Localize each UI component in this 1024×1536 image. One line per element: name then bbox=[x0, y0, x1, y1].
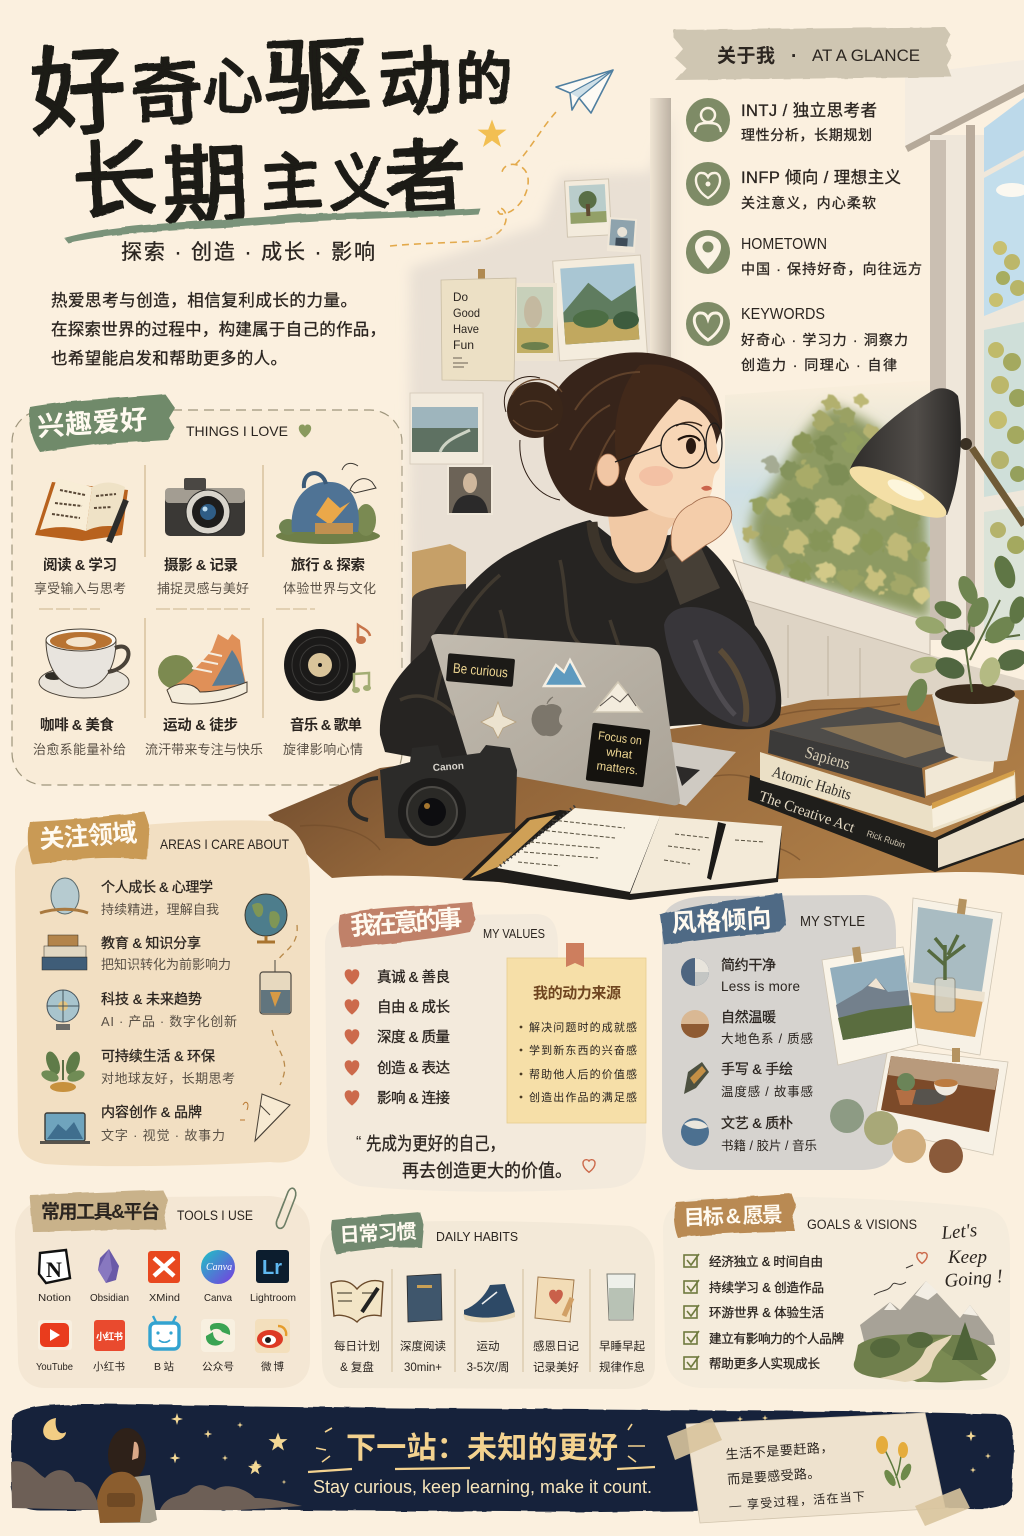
title: 动 bbox=[375, 21, 455, 132]
quote bbox=[356, 1134, 595, 1181]
tool: xmind: XMind bbox=[149, 1292, 180, 1304]
tool: notion bbox=[38, 1250, 71, 1304]
item: hometown: 中国 · 保持好奇，向往远方 bbox=[741, 261, 922, 277]
item: sustainability bbox=[40, 1048, 235, 1092]
habit: gratitude journal: 记录美好 bbox=[533, 1360, 579, 1374]
value list: 真诚 & 善良 bbox=[377, 968, 450, 986]
title: 期 bbox=[160, 114, 250, 242]
habit: gratitude journal bbox=[533, 1277, 579, 1374]
eye and brow bbox=[686, 438, 696, 454]
window frame and panes bbox=[930, 135, 1024, 640]
book: atomic habits bbox=[760, 752, 1016, 832]
habit: exercise: 运动 bbox=[476, 1340, 500, 1353]
habit: exercise: 3-5次/周 bbox=[467, 1360, 509, 1374]
ribbon bbox=[30, 1190, 168, 1232]
clouds bbox=[11, 1461, 302, 1510]
tool: canva bbox=[201, 1250, 235, 1304]
item: warm: 自然温暖 bbox=[721, 1009, 776, 1025]
note: do good have fun bbox=[441, 278, 516, 381]
statue print bbox=[515, 283, 557, 361]
item: keywords: 创造力 · 同理心 · 自律 bbox=[741, 357, 897, 373]
habit: exercise bbox=[463, 1284, 515, 1374]
habit: deep reading: 30min+ bbox=[404, 1362, 442, 1374]
item: technology bbox=[47, 990, 237, 1030]
pen bbox=[707, 822, 726, 880]
item: keywords bbox=[686, 302, 908, 373]
illustration: camera: Canon bbox=[432, 761, 464, 774]
ribbon bbox=[28, 812, 149, 864]
tool: notion: Notion bbox=[38, 1292, 71, 1304]
portrait postcard bbox=[447, 465, 493, 515]
sticker: focus on what matters bbox=[586, 723, 650, 787]
flower bbox=[876, 1436, 913, 1488]
fringe bbox=[615, 364, 720, 484]
handwritten note: Keep bbox=[947, 1247, 987, 1268]
tool: lightroom bbox=[250, 1250, 296, 1304]
illustration: open notebook bbox=[462, 806, 782, 900]
title bbox=[26, 9, 512, 242]
note paper: 而是要感受路。 bbox=[727, 1465, 821, 1487]
banner subtitle: Stay curious, keep learning, make it count. bbox=[313, 1476, 652, 1497]
panel shape bbox=[662, 895, 896, 1170]
title: 心 bbox=[203, 39, 263, 126]
small tree postcard bbox=[565, 179, 611, 237]
item: music: 音乐 & 歌单 bbox=[290, 716, 362, 734]
icon: jar bbox=[260, 960, 291, 1014]
tool: canva: Canva bbox=[206, 1262, 232, 1273]
checklist: 帮助更多人实现成长 bbox=[709, 1356, 820, 1371]
window sill bbox=[733, 560, 930, 655]
habit: sleep early and water: 早睡早起 bbox=[599, 1340, 645, 1353]
item: keywords: KEYWORDS bbox=[741, 306, 825, 323]
tool: lightroom: Lightroom bbox=[250, 1292, 296, 1304]
title: 主 bbox=[258, 130, 324, 224]
habit: sleep early and water bbox=[599, 1274, 645, 1374]
book: sapiens: Sapiens bbox=[803, 743, 852, 774]
pot bbox=[932, 687, 1019, 762]
panel shape bbox=[325, 914, 646, 1192]
tool: xiaohongshu: 小红书 bbox=[96, 1331, 123, 1343]
item: intj: 理性分析，长期规划 bbox=[741, 127, 872, 143]
item: travel: 体验世界与文化 bbox=[283, 581, 376, 596]
panel shape bbox=[663, 1197, 1010, 1390]
intro paragraph: 也希望能启发和帮助更多的人。 bbox=[51, 349, 287, 368]
item: sustainability: 对地球友好，长期思考 bbox=[101, 1071, 235, 1086]
quote: 再去创造更大的价值。 bbox=[402, 1161, 572, 1181]
tool: youtube bbox=[36, 1320, 73, 1373]
tool: xiaohongshu bbox=[93, 1320, 125, 1373]
collar bbox=[592, 522, 676, 578]
item: sport bbox=[145, 634, 263, 757]
habit: deep reading bbox=[400, 1274, 446, 1374]
ribbon bbox=[331, 1212, 424, 1254]
item: literary bbox=[681, 1115, 817, 1153]
lid bbox=[431, 634, 680, 805]
intro paragraph: 热爱思考与创造，相信复利成长的力量。 bbox=[51, 291, 357, 310]
star bbox=[478, 120, 506, 147]
item: education bbox=[42, 935, 231, 972]
item: warm bbox=[681, 1009, 813, 1046]
item: infp: INFP 倾向 / 理想主义 bbox=[741, 168, 901, 187]
sticky note: motivation bbox=[507, 943, 646, 1123]
dividers bbox=[145, 465, 263, 718]
keyboard base bbox=[672, 742, 736, 806]
note paper: — 享受过程，活在当下 bbox=[729, 1488, 865, 1513]
heading: 目标 & 愿景 bbox=[683, 1204, 783, 1230]
tool: bilibili: B站 bbox=[154, 1360, 174, 1373]
icon: paper plane bbox=[556, 70, 613, 113]
ribbon bbox=[29, 394, 175, 452]
face bbox=[622, 397, 720, 518]
sticky note: motivation: 创造出作品的满足感 bbox=[529, 1090, 637, 1104]
icon: heart bbox=[299, 424, 311, 437]
item: intj: INTJ / 独立思考者 bbox=[741, 101, 877, 120]
sweater bbox=[380, 520, 781, 762]
heading: 关注领域 bbox=[38, 819, 138, 854]
birds bbox=[874, 1265, 913, 1295]
tool: xiaohongshu: 小红书 bbox=[93, 1360, 125, 1373]
banner: next stop bbox=[11, 1404, 1014, 1526]
tool: weibo: 微博 bbox=[261, 1360, 284, 1373]
heading: 关于我 bbox=[717, 45, 775, 67]
book: the creative act bbox=[748, 775, 1024, 872]
panel: my values bbox=[325, 902, 646, 1192]
item: warm: 大地色系 / 质感 bbox=[721, 1031, 813, 1046]
item: education: 把知识转化为前影响力 bbox=[101, 957, 231, 972]
book: sapiens bbox=[768, 707, 996, 798]
handwritten note: Let's bbox=[940, 1220, 978, 1244]
girl with backpack bbox=[97, 1428, 157, 1523]
habit: daily plan bbox=[331, 1281, 383, 1374]
item: sustainability: 可持续生活 & 环保 bbox=[101, 1048, 215, 1064]
value list: 自由 & 成长 bbox=[377, 999, 450, 1016]
item: coffee: 治愈系能量补给 bbox=[33, 742, 126, 757]
tool: obsidian: Obsidian bbox=[90, 1292, 129, 1304]
panel: my style: MY STYLE bbox=[800, 914, 865, 930]
title: 奇 bbox=[127, 32, 206, 141]
illustration: mountains and road bbox=[854, 1281, 996, 1382]
ear bbox=[597, 454, 619, 486]
panel: about at a glance bbox=[674, 27, 952, 373]
sticker: be curious bbox=[446, 653, 515, 687]
dashed trail bbox=[272, 925, 297, 1085]
tape bbox=[478, 269, 485, 284]
sticky note: motivation: 学到新东西的兴奋感 bbox=[529, 1043, 637, 1057]
colour swatches bbox=[830, 1099, 963, 1173]
book: the creative act: The Creative Act bbox=[757, 789, 857, 837]
tool: youtube: YouTube bbox=[36, 1361, 73, 1373]
subtitle: 探索 · 创造 · 成长 · 影响 bbox=[121, 241, 375, 264]
illustration: desk plant bbox=[903, 553, 1024, 762]
habit: daily plan: 每日计划 bbox=[334, 1339, 380, 1353]
note: do good have fun: Do bbox=[453, 290, 468, 304]
tool: canva: Canva bbox=[204, 1292, 232, 1304]
panel: areas i care about bbox=[15, 812, 310, 1166]
ribbon bbox=[674, 27, 952, 80]
item: technology: 科技 & 未来趋势 bbox=[101, 991, 202, 1007]
sticker: outline mountain bbox=[594, 682, 642, 712]
title: 好 bbox=[26, 12, 129, 156]
sticky note: motivation: 我的动力来源 bbox=[533, 984, 621, 1002]
item: content creation bbox=[40, 1104, 225, 1144]
tape bbox=[667, 1418, 722, 1460]
neck bbox=[606, 500, 682, 573]
checklist bbox=[684, 1254, 844, 1371]
tool: xmind bbox=[148, 1251, 180, 1304]
tool: weibo bbox=[255, 1319, 290, 1373]
panel: goals and visions bbox=[663, 1194, 1010, 1390]
illustration: desk lamp bbox=[844, 388, 1024, 527]
illustration: desk bbox=[268, 690, 1024, 891]
panel shape bbox=[15, 820, 310, 1166]
title: 者 bbox=[381, 111, 469, 234]
book: the creative act: Rick Rubin bbox=[865, 828, 907, 850]
checklist: 持续学习 & 创造作品 bbox=[709, 1280, 824, 1295]
panel: tools bbox=[15, 1188, 310, 1388]
panel shape bbox=[15, 1196, 310, 1388]
sticky note: motivation: 解决问题时的成就感 bbox=[529, 1020, 637, 1034]
item: travel: 旅行 & 探索 bbox=[291, 556, 365, 574]
heading: 风格倾向 bbox=[671, 905, 772, 938]
item: growth: 个人成长 & 心理学 bbox=[101, 879, 213, 895]
raised arm bbox=[664, 607, 776, 727]
item: infp: 关注意义，内心柔软 bbox=[741, 195, 876, 211]
polaroid: mountain bbox=[822, 947, 918, 1065]
intro paragraph: 在探索世界的过程中，构建属于自己的作品， bbox=[51, 320, 386, 339]
dividers bbox=[392, 1269, 590, 1372]
item: infp bbox=[686, 162, 901, 211]
item: photography: 捕捉灵感与美好 bbox=[157, 581, 249, 596]
icon: paperclip bbox=[276, 1188, 296, 1228]
item: sport: 流汗带来专注与快乐 bbox=[145, 742, 263, 757]
illustration: wall pictures bbox=[410, 179, 647, 690]
heading: 日常习惯 bbox=[339, 1220, 417, 1247]
banner heading: 下一站：未知的更好 bbox=[346, 1432, 618, 1465]
illustration: laptop bbox=[431, 634, 736, 806]
panel: daily habits: DAILY HABITS bbox=[436, 1229, 518, 1244]
panel: about at a glance: AT A GLANCE bbox=[812, 46, 920, 65]
item: reading: 阅读 & 学习 bbox=[43, 556, 117, 574]
moon bbox=[43, 1418, 66, 1440]
item: content creation: 文字 · 视觉 · 故事力 bbox=[101, 1128, 225, 1143]
hair bun bbox=[504, 377, 563, 500]
item: growth bbox=[40, 878, 219, 917]
habit: gratitude journal: 感恩日记 bbox=[533, 1339, 579, 1353]
polaroid: coffee on table bbox=[873, 1048, 1008, 1155]
icon: heart bbox=[917, 1253, 927, 1263]
quote: “ bbox=[356, 1134, 361, 1151]
tool: obsidian bbox=[90, 1249, 129, 1304]
landscape print bbox=[553, 255, 647, 361]
panel: hobbies: THINGS I LOVE bbox=[186, 423, 288, 439]
sticker: mountain bbox=[544, 660, 584, 686]
checklist: 经济独立 & 时间自由 bbox=[709, 1254, 823, 1269]
item: reading: 享受输入与思考 bbox=[34, 581, 126, 596]
hair back bbox=[544, 352, 722, 517]
item: music bbox=[283, 625, 371, 757]
value list: 深度 & 质量 bbox=[377, 1029, 450, 1046]
glasses bbox=[615, 423, 722, 468]
item: content creation: 内容创作 & 品牌 bbox=[101, 1104, 202, 1120]
title: 驱 bbox=[260, 9, 373, 132]
item: handwriting: 温度感 / 故事感 bbox=[721, 1084, 813, 1099]
handwritten note: Going ! bbox=[944, 1266, 1004, 1292]
sticker: star bbox=[481, 702, 516, 738]
icon: sketched paper plane bbox=[240, 1094, 290, 1141]
value list bbox=[345, 968, 450, 1107]
illustration: stacked books bbox=[748, 707, 1024, 872]
item: coffee bbox=[33, 629, 129, 757]
habit: sleep early and water: 规律作息 bbox=[599, 1360, 645, 1374]
panel: my values: MY VALUES bbox=[483, 926, 545, 941]
lower wall panels bbox=[745, 600, 1024, 712]
panel: my style bbox=[660, 893, 1008, 1173]
item: travel bbox=[276, 463, 380, 596]
ribbon bbox=[339, 902, 476, 948]
handwritten note bbox=[940, 1220, 1004, 1292]
note paper: 生活不是要赶路， bbox=[725, 1439, 834, 1462]
habit: deep reading: 深度阅读 bbox=[400, 1339, 446, 1353]
panel: tools: TOOLS I USE bbox=[177, 1208, 253, 1223]
item: literary: 书籍 / 胶片 / 音乐 bbox=[721, 1138, 817, 1153]
panel: areas i care about: AREAS I CARE ABOUT bbox=[160, 836, 289, 852]
panel shape bbox=[320, 1221, 655, 1389]
cardboard box and chair bbox=[412, 544, 466, 598]
item: handwriting: 手写 & 手绘 bbox=[721, 1061, 793, 1077]
item: keywords: 好奇心 · 学习力 · 洞察力 bbox=[741, 332, 908, 348]
item: hometown: HOMETOWN bbox=[741, 236, 827, 253]
item: photography bbox=[157, 478, 249, 596]
intro paragraph bbox=[51, 291, 386, 368]
title underline brush stroke bbox=[64, 208, 480, 243]
small portrait postcard bbox=[607, 217, 637, 253]
title: 的 bbox=[456, 35, 512, 116]
sticker: focus on what matters: what bbox=[604, 744, 634, 762]
item: sport: 运动 & 徒步 bbox=[163, 717, 238, 734]
tool: notion: N bbox=[46, 1257, 62, 1282]
dashed flight path bbox=[390, 112, 556, 246]
note: do good have fun: Fun bbox=[453, 338, 474, 352]
heading: 常用工具&平台 bbox=[41, 1200, 160, 1223]
value list: 影响 & 连接 bbox=[377, 1090, 450, 1107]
panel frame bbox=[12, 410, 402, 785]
ribbon bbox=[674, 1194, 796, 1238]
checklist: 环游世界 & 体验生活 bbox=[709, 1305, 824, 1320]
stars bbox=[170, 1413, 991, 1484]
item: music: 旋律影响心情 bbox=[283, 742, 363, 757]
item: literary: 文艺 & 质朴 bbox=[721, 1115, 793, 1131]
tool: wechat official account bbox=[201, 1319, 235, 1373]
panel: hobbies bbox=[12, 394, 402, 785]
heading: 我在意的事 bbox=[349, 904, 463, 941]
landscape postcard bbox=[410, 393, 483, 464]
deco strokes bbox=[308, 1467, 655, 1472]
item: handwriting bbox=[684, 1061, 813, 1099]
value list: 创造 & 表达 bbox=[377, 1060, 450, 1077]
item: intj bbox=[686, 98, 877, 143]
quote: 先成为更好的自己， bbox=[366, 1134, 505, 1154]
illustration: camera bbox=[350, 745, 517, 846]
window header bbox=[905, 60, 1024, 148]
title: 长 bbox=[69, 112, 159, 237]
panel: about at a glance: · bbox=[791, 46, 797, 67]
ribbon bbox=[660, 893, 786, 945]
item: education: 教育 & 知识分享 bbox=[101, 935, 201, 951]
panel: daily habits bbox=[320, 1212, 655, 1389]
item: minimal: 简约干净 bbox=[721, 957, 776, 973]
night sky band bbox=[11, 1404, 1014, 1512]
item: reading bbox=[34, 478, 128, 596]
note paper bbox=[667, 1413, 970, 1526]
sticker: focus on what matters: matters. bbox=[596, 759, 639, 778]
lens bbox=[398, 778, 466, 846]
item: minimal: Less is more bbox=[721, 979, 800, 994]
item: hometown bbox=[686, 230, 922, 277]
panel: goals and visions: GOALS & VISIONS bbox=[807, 1217, 917, 1232]
note: do good have fun: Have bbox=[453, 322, 479, 336]
sticky note: motivation: 帮助他人后的价值感 bbox=[529, 1067, 637, 1081]
heading: 兴趣爱好 bbox=[36, 405, 148, 442]
icon: globe bbox=[245, 894, 287, 942]
title: 义 bbox=[326, 133, 390, 223]
book: atomic habits: Atomic Habits bbox=[770, 764, 853, 804]
wall column bbox=[650, 98, 671, 478]
window glass with tree bbox=[725, 380, 930, 628]
tool: bilibili bbox=[150, 1316, 179, 1373]
item: growth: 持续精进，理解自我 bbox=[101, 902, 219, 917]
item: technology: AI · 产品 · 数字化创新 bbox=[101, 1014, 237, 1029]
polaroid: plant in vase bbox=[905, 898, 1002, 1055]
apple logo bbox=[532, 697, 562, 736]
sticker: focus on what matters: Focus on bbox=[597, 728, 643, 748]
item: coffee: 咖啡 & 美食 bbox=[40, 716, 114, 734]
item: minimal bbox=[681, 957, 800, 994]
hand bbox=[671, 497, 732, 562]
note: do good have fun: Good bbox=[453, 306, 480, 320]
tool: wechat official account: 公众号 bbox=[202, 1361, 234, 1373]
wall bbox=[408, 110, 672, 700]
habit: daily plan: & 复盘 bbox=[340, 1360, 374, 1374]
checklist: 建立有影响力的个人品牌 bbox=[709, 1331, 844, 1346]
illustration: room background bbox=[408, 60, 1024, 712]
tool: lightroom: Lr bbox=[262, 1257, 282, 1279]
sticker: be curious: Be curious bbox=[452, 660, 509, 680]
lips bbox=[701, 486, 712, 491]
cuff bbox=[664, 545, 720, 605]
illustration: girl bbox=[380, 352, 781, 762]
item: photography: 摄影 & 记录 bbox=[164, 556, 238, 574]
